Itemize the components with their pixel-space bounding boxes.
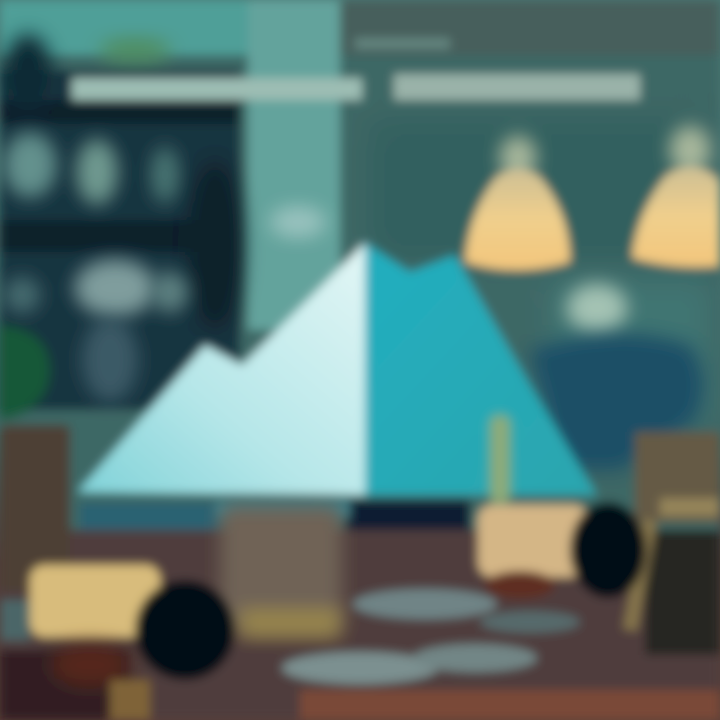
title band	[72, 38, 640, 100]
mountain right teal face	[365, 243, 597, 495]
stacked plates	[282, 589, 580, 684]
mountain left pale face	[78, 243, 372, 495]
small label on column	[270, 206, 326, 238]
left box	[0, 425, 70, 590]
cup: centre	[220, 505, 342, 638]
table surface	[0, 530, 720, 720]
dark strip under mountain	[80, 500, 470, 536]
icon: left scroll	[30, 565, 235, 720]
icon: right pendant lamp	[632, 126, 720, 267]
right box	[630, 432, 720, 655]
panel: dark shelves	[0, 34, 243, 410]
chart: mountain	[78, 243, 597, 495]
light column	[248, 0, 340, 330]
icon: right scroll	[478, 502, 646, 599]
icon: small globe lamp	[567, 284, 627, 332]
icon: left pendant lamp	[465, 136, 570, 270]
stem on the mountain	[490, 415, 510, 505]
dark blue armchair	[530, 334, 704, 470]
plant	[0, 325, 50, 420]
